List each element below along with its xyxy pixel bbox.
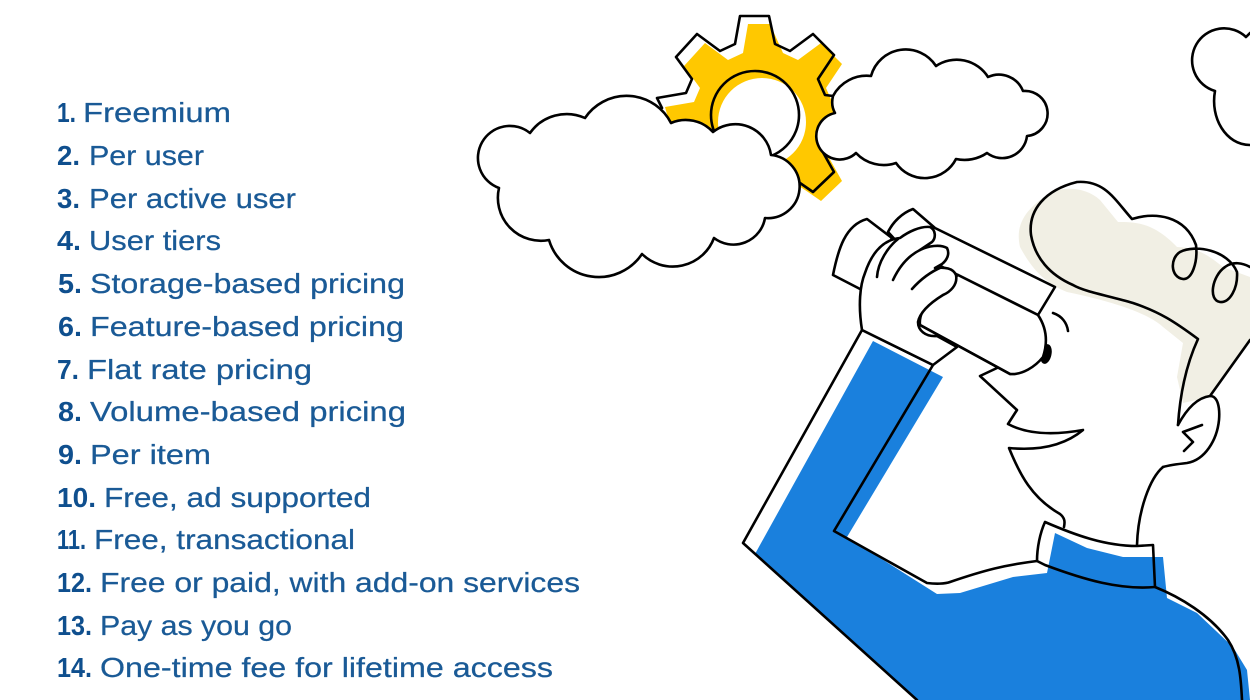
item 1: 1. (57, 97, 76, 128)
item 5: Storage-based pricing (90, 268, 405, 299)
hair outline (1031, 182, 1250, 425)
list of pricing models (57, 97, 580, 683)
front barrel (920, 275, 1046, 374)
cloud: top right partial (1192, 28, 1250, 145)
item 11: 11. (57, 524, 86, 555)
item 5: 5. (58, 268, 82, 299)
item 11: Free, transactional (94, 524, 355, 555)
hair fill (1019, 189, 1250, 403)
finger creases (877, 239, 942, 289)
hand (860, 227, 957, 365)
item 4: 4. (57, 225, 81, 256)
person with binoculars (743, 182, 1250, 700)
sweater outline (743, 330, 1037, 700)
cloud: large left (478, 96, 800, 277)
binoculars (833, 209, 1055, 374)
item 14: One-time fee for lifetime access (100, 652, 553, 683)
item 2: 2. (57, 140, 80, 171)
icon: gear (657, 16, 842, 201)
collar (1037, 522, 1155, 588)
item 1: Freemium (83, 97, 231, 128)
item 3: Per active user (89, 183, 296, 214)
item 9 (58, 439, 211, 470)
barrel lower edge (920, 325, 1010, 374)
item 6: Feature-based pricing (90, 311, 404, 342)
item 12: 12. (57, 567, 92, 598)
item 7: 7. (57, 354, 79, 385)
item 6: 6. (58, 311, 82, 342)
neck (1137, 467, 1163, 545)
item 12: Free or paid, with add-on services (100, 567, 580, 598)
item 14: 14. (57, 652, 92, 683)
item 13: 13. (57, 610, 92, 641)
item 9: 9. (58, 439, 82, 470)
item 3: 3. (57, 183, 80, 214)
eye (1039, 343, 1053, 365)
eyebrow (1053, 313, 1068, 331)
item 8: Volume-based pricing (90, 396, 406, 427)
sweater fill (755, 341, 1250, 700)
shoulder line (1155, 587, 1242, 700)
item 10: 10. (57, 482, 96, 513)
item 2: Per user (89, 140, 204, 171)
item 10: Free, ad supported (104, 482, 371, 513)
item 9: Per item (90, 439, 211, 470)
face profile (980, 368, 1083, 527)
back barrel (833, 219, 892, 290)
item 7: Flat rate pricing (87, 354, 312, 385)
item 13: Pay as you go (100, 610, 292, 641)
item 8: 8. (58, 396, 82, 427)
cloud: middle (816, 49, 1048, 178)
ear (1163, 340, 1250, 467)
item 4: User tiers (89, 225, 221, 256)
